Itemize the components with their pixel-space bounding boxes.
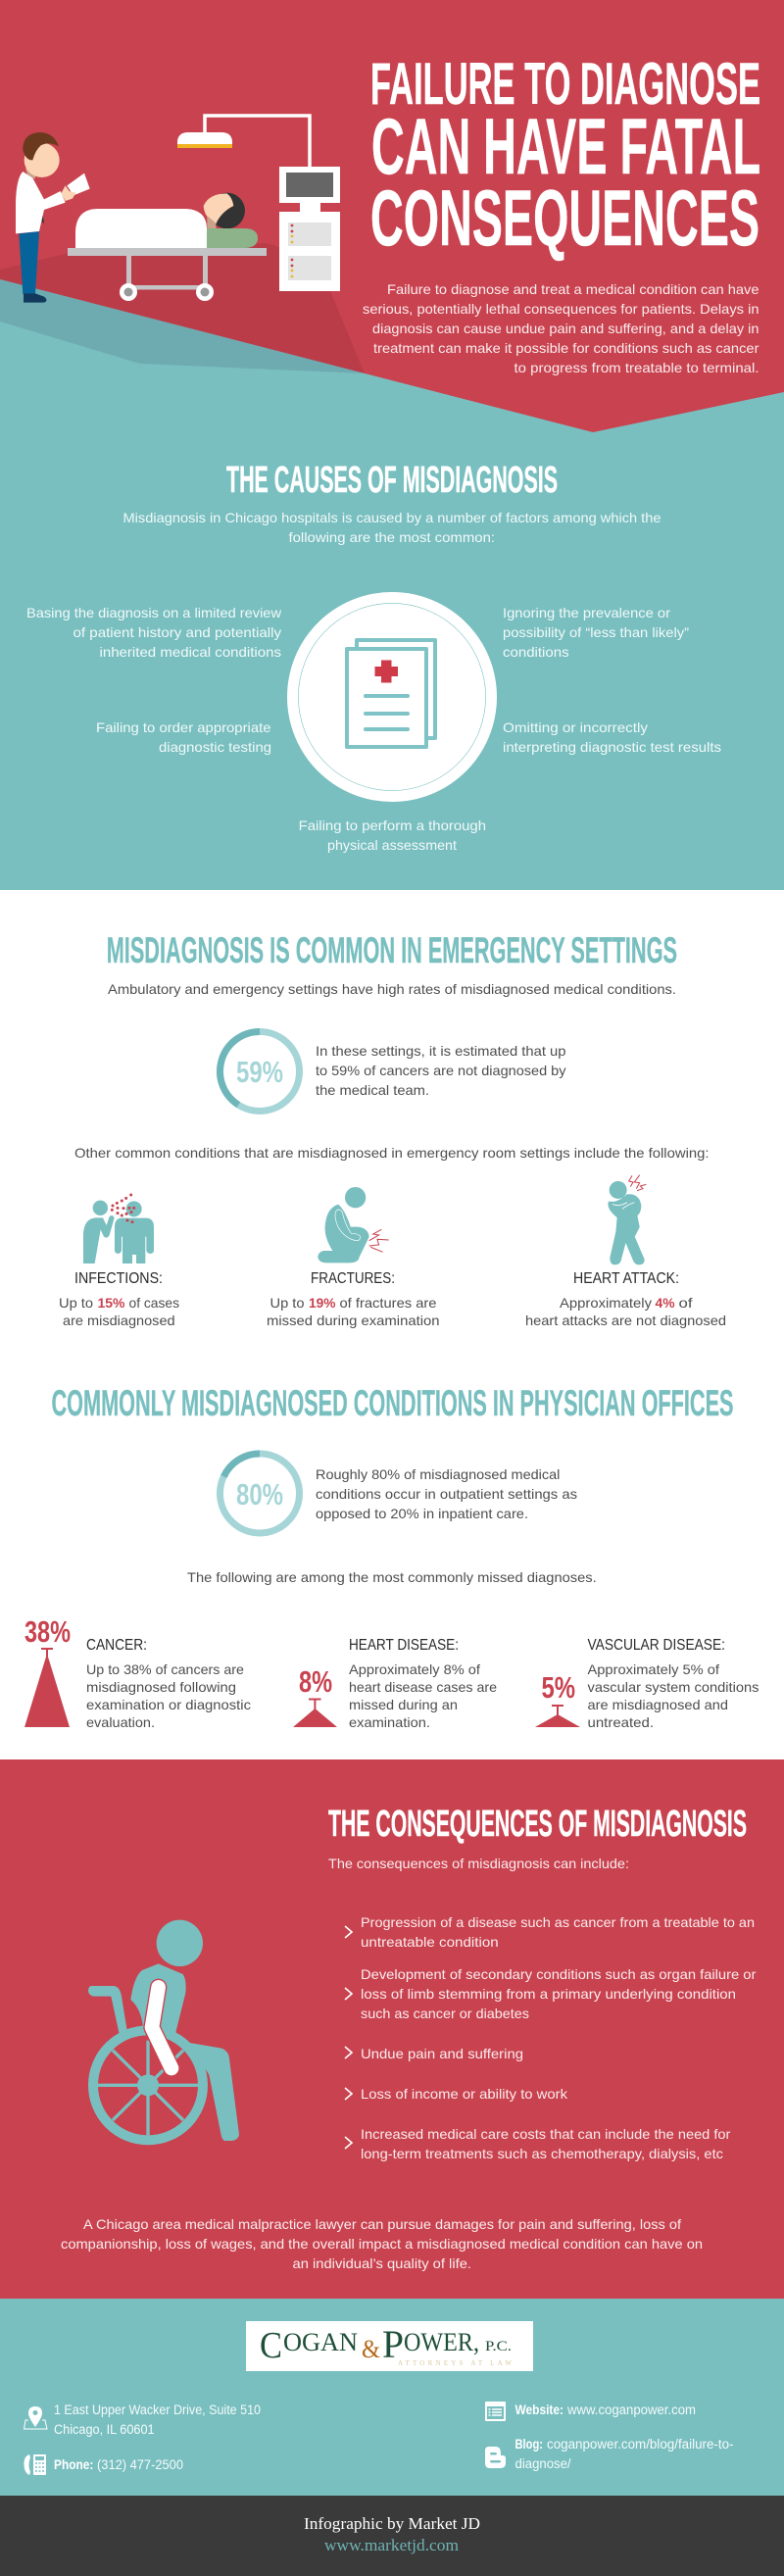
logo: Cogan & Power: OGAN (283, 2328, 358, 2356)
logo: Cogan & Power: P (382, 2322, 404, 2366)
text block: intro: to progress from treatable to terminal. (514, 360, 759, 375)
text block: heart disease: heart disease cases are (349, 1679, 497, 1695)
label: fractures: 19% (309, 1295, 336, 1311)
text block: 59% detail: the medical team. (316, 1082, 429, 1098)
text block: 80% detail: opposed to 20% in inpatient care. (316, 1506, 528, 1521)
icon: medical documents in circle (287, 592, 497, 802)
cause: ignoring prevalence: conditions (503, 644, 569, 660)
text block: lawyer closing: A Chicago area medical malpractice lawyer can pursue damages for pain and suffering, loss of (83, 2216, 681, 2232)
cause: ignoring prevalence (503, 605, 689, 660)
cause: omitting results: Omitting or incorrectly (503, 719, 648, 735)
text block: causes intro: following are the most common: (288, 529, 495, 545)
panel: teal background of hero and causes (0, 0, 784, 890)
icon: doctor reading chart (16, 132, 90, 303)
text block: heart disease (349, 1637, 497, 1730)
text block: phone: Phone: (54, 2457, 93, 2472)
text block: credit (304, 2514, 480, 2554)
text block: intro: serious, potentially lethal consequences for patients. Delays in (363, 301, 759, 317)
label: fractures: missed during examination (267, 1313, 439, 1328)
text block: website (515, 2403, 696, 2417)
text block: cancer: CANCER: (86, 1637, 147, 1654)
cause: limited review: of patient history and potentially (73, 624, 281, 640)
text block: lawyer closing (61, 2216, 703, 2271)
list: consequences: Undue pain and suffering (361, 2046, 523, 2061)
text block: 80% detail: conditions occur in outpatient settings as (316, 1486, 577, 1502)
text block: blog: coganpower.com/blog/failure-to- (547, 2437, 733, 2452)
logo: Cogan & Power: & (362, 2335, 380, 2363)
text block: 80% detail: Roughly 80% of misdiagnosed medical (316, 1466, 560, 1482)
label: infections: 15% (98, 1295, 125, 1311)
label: fractures: of fractures are (339, 1295, 437, 1311)
floor shadow on red (0, 243, 365, 373)
text block: 59% detail: to 59% of cancers are not diagnosed by (316, 1063, 566, 1078)
list: consequences: long-term treatments such as chemotherapy, dialysis, etc (361, 2146, 723, 2161)
list: consequences: Development of secondary conditions such as organ failure or (361, 1966, 757, 1982)
label: infections (59, 1270, 179, 1328)
text block: lawyer closing: an individual’s quality of life. (292, 2255, 471, 2271)
icon: fractures (318, 1187, 389, 1263)
cause: physical assessment: Failing to perform a thorough (299, 817, 486, 833)
cause: limited review: Basing the diagnosis on a limited review (26, 605, 282, 620)
icon: wheelchair (88, 1920, 239, 2141)
text block: consequences intro: The consequences of misdiagnosis can include: (328, 1856, 629, 1871)
chart: 59% donut (220, 1031, 300, 1112)
text block: address (54, 2403, 261, 2437)
text block: vascular disease: vascular system conditions (588, 1679, 759, 1695)
text block: blog: diagnose/ (515, 2456, 571, 2471)
cause: limited review: inherited medical conditions (100, 644, 281, 660)
text block: credit: www.marketjd.com (324, 2536, 459, 2554)
text block: intro: treatment can make it possible for conditions such as cancer (373, 340, 760, 356)
title (370, 51, 760, 263)
text block: heart disease: HEART DISEASE: (349, 1637, 459, 1654)
icon: blogger (485, 2447, 506, 2468)
cause: omitting results: interpreting diagnostic test results (503, 739, 721, 755)
cause: omitting results (503, 719, 721, 755)
cause: failing to order testing: diagnostic testing (159, 739, 271, 755)
floor shadow on teal (0, 279, 365, 373)
cause: limited review (26, 605, 282, 660)
chart: 38% pyramid (24, 1614, 71, 1727)
text block: lawyer closing: companionship, loss of wages, and the overall impact a misdiagnosed medical condition can have on (61, 2236, 703, 2252)
icon: bed with patient (68, 193, 267, 301)
icon: website (485, 2402, 506, 2421)
panel: hero red banner (0, 0, 784, 432)
text block: website: Website: (515, 2403, 564, 2417)
list: consequences: untreatable condition (361, 1934, 499, 1950)
panel: consequences (0, 1759, 784, 2299)
text block: cancer: misdiagnosed following (86, 1679, 236, 1695)
icon: map pin (24, 2406, 47, 2429)
logo: Cogan & Power: OWER, (404, 2328, 479, 2356)
list: consequences: Increased medical care costs that can include the need for (361, 2126, 731, 2142)
label: infections: Up to (59, 1295, 93, 1311)
text block: address: Chicago, IL 60601 (54, 2422, 155, 2437)
list: consequences: Loss of income or ability to work (361, 2086, 568, 2102)
logo: Cogan & Power: ATTORNEYS AT LAW (398, 2359, 512, 2367)
text block: 59% detail (316, 1043, 566, 1098)
icon: lamp and arm (177, 116, 310, 168)
label: heart attack: heart attacks are not diagnosed (525, 1313, 726, 1328)
label: infections: of cases (129, 1295, 179, 1311)
text block: intro: Failure to diagnose and treat a medical condition can have (387, 281, 760, 297)
label: fractures: FRACTURES: (311, 1270, 395, 1287)
label: heart attack (525, 1270, 726, 1328)
chart: 5% pyramid (535, 1670, 580, 1727)
text block: phone (54, 2457, 183, 2472)
text block: causes intro (123, 510, 662, 545)
panel: contact footer (0, 2299, 784, 2496)
chart: 8% pyramid (293, 1664, 337, 1727)
label: fractures: Up to (270, 1295, 305, 1311)
cause: physical assessment (299, 817, 486, 853)
text block: vascular disease: Approximately 5% of (588, 1661, 719, 1677)
label: fractures (267, 1270, 439, 1328)
text block: cancer: evaluation. (86, 1714, 155, 1730)
cause: physical assessment: physical assessment (327, 837, 457, 853)
logo: Cogan & Power (246, 2321, 533, 2371)
text block: vascular disease (588, 1637, 759, 1730)
text block: most commonly missed: The following are among the most commonly missed diagnoses. (187, 1569, 597, 1585)
text block: cancer (86, 1637, 251, 1730)
cause: failing to order testing (96, 719, 271, 755)
chart: 80% donut: 80% (236, 1477, 283, 1511)
label: heart attack: HEART ATTACK: (573, 1270, 679, 1287)
text block: causes intro: Misdiagnosis in Chicago hospitals is caused by a number of factors among which the (123, 510, 662, 525)
text block: blog: Blog: (515, 2437, 543, 2452)
list: consequences: loss of limb stemming from a primary underlying condition (361, 1986, 736, 2002)
chart: 80% donut (220, 1454, 300, 1533)
text block: heart disease: missed during an (349, 1697, 458, 1712)
text block: heart disease: Approximately 8% of (349, 1661, 480, 1677)
text block: address: 1 East Upper Wacker Drive, Suite 510 (54, 2403, 261, 2417)
text block: other conditions: Other common conditions that are misdiagnosed in emergency room settings include the following: (74, 1145, 710, 1161)
icon: infections (83, 1193, 154, 1263)
label: heart attack: 4% (655, 1295, 675, 1311)
text block: 59% detail: In these settings, it is estimated that up (316, 1043, 566, 1059)
text block: cancer: Up to 38% of cancers are (86, 1661, 244, 1677)
icon: heart attack (609, 1175, 646, 1263)
label: infections: INFECTIONS: (74, 1270, 163, 1287)
chart: 5% pyramid: 5% (541, 1670, 575, 1705)
text block: vascular disease: VASCULAR DISEASE: (588, 1637, 725, 1654)
text block: ambulatory: Ambulatory and emergency settings have high rates of misdiagnosed medical conditions. (108, 981, 676, 997)
list: consequences: Progression of a disease such as cancer from a treatable to an (361, 1914, 755, 1930)
icon: medical monitor (279, 167, 340, 291)
cause: ignoring prevalence: possibility of “less than likely” (503, 624, 689, 640)
cause: ignoring prevalence: Ignoring the prevalence or (503, 605, 670, 620)
logo: Cogan & Power: P.C. (485, 2339, 512, 2354)
icon: phone (24, 2454, 46, 2475)
list: consequences: such as cancer or diabetes (361, 2006, 529, 2021)
label: infections: are misdiagnosed (63, 1313, 175, 1328)
label: heart attack: Approximately (560, 1295, 652, 1311)
logo: Cogan & Power: C (260, 2325, 282, 2366)
chart: 38% pyramid: 38% (24, 1614, 71, 1649)
text block: vascular disease: are misdiagnosed and (588, 1697, 728, 1712)
text block: intro (363, 281, 760, 375)
chart: 59% donut: 59% (236, 1055, 283, 1089)
text block: cancer: examination or diagnostic (86, 1697, 251, 1712)
list: consequences (345, 1914, 757, 2161)
text block: vascular disease: untreated. (588, 1714, 654, 1730)
text block: phone: (312) 477-2500 (97, 2457, 183, 2472)
chart: 8% pyramid: 8% (299, 1664, 332, 1699)
panel: credit bar (0, 2496, 784, 2576)
cause: failing to order testing: Failing to order appropriate (96, 719, 271, 735)
text block: intro: diagnosis can cause undue pain and suffering, and a delay in (372, 321, 759, 336)
text block: blog (515, 2437, 733, 2471)
text block: 80% detail (316, 1466, 577, 1521)
text block: website: www.coganpower.com (566, 2403, 696, 2417)
text block: heart disease: examination. (349, 1714, 430, 1730)
text block: credit: Infographic by Market JD (304, 2514, 480, 2533)
label: heart attack: of (678, 1295, 693, 1311)
